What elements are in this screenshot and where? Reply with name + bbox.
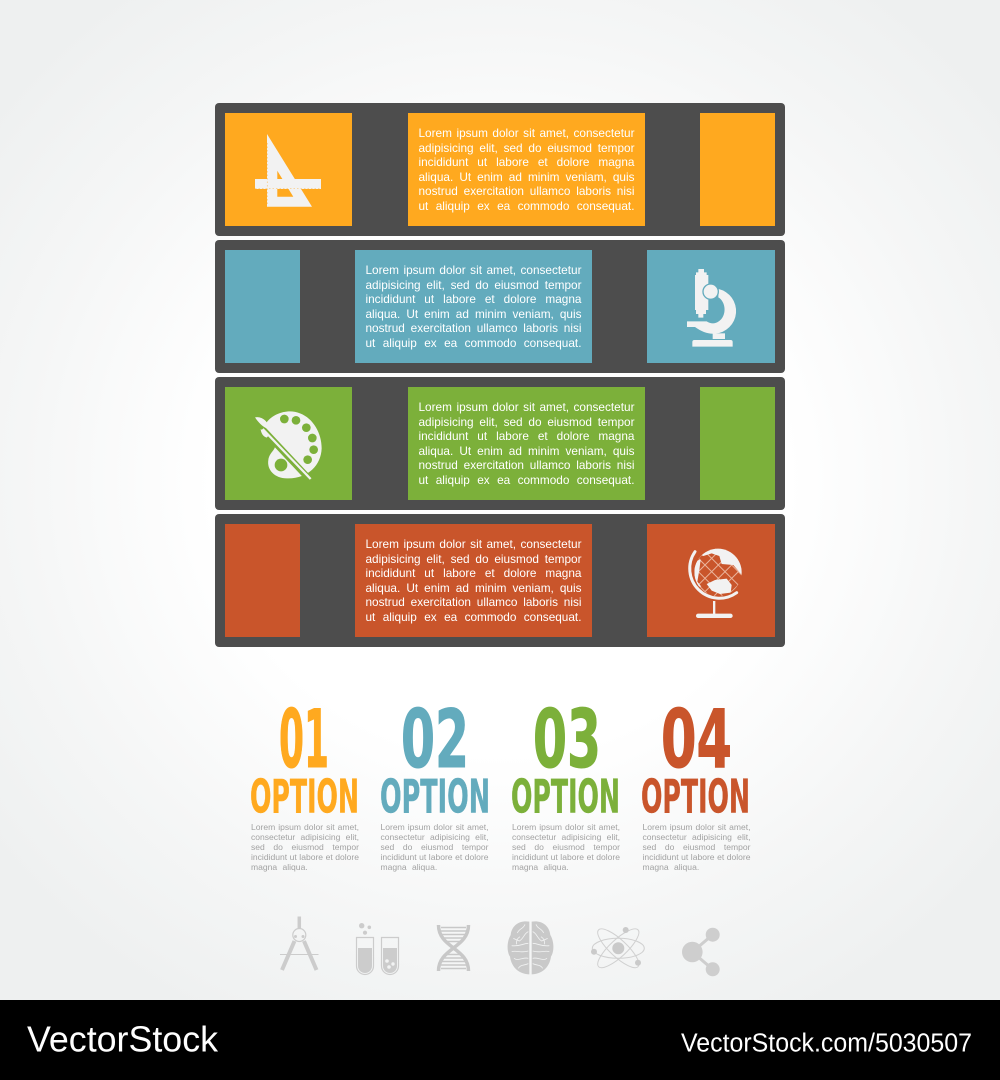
option 1 text: sed do eiusmod tempor <box>251 842 359 852</box>
text block: ut aliquip ex ea commodo consequat. <box>366 336 582 350</box>
option 4 text: Lorem ipsum dolor sit amet, <box>642 822 750 832</box>
red block with globe icon <box>647 524 775 637</box>
text block: adipisicing elit, sed do eiusmod tempor <box>418 414 634 428</box>
icon: painter palette <box>255 411 322 480</box>
text block: nostrud exercitation ullamco laboris nisi <box>366 595 582 609</box>
option 2 text: incididunt ut labore et dolore <box>380 852 488 862</box>
icon: set square and ruler <box>255 134 321 207</box>
green block with palette icon <box>225 387 352 500</box>
option 2 text: magna aliqua. <box>380 862 437 872</box>
option 1 text <box>251 822 359 872</box>
text block: Lorem ipsum dolor sit amet, consectetur <box>366 537 582 551</box>
footer watermark bar <box>0 1000 1000 1080</box>
icon: compass <box>280 916 318 970</box>
orange side block <box>700 113 775 226</box>
text block: Lorem ipsum dolor sit amet, consectetur <box>418 126 634 140</box>
option 2 text: sed do eiusmod tempor <box>380 842 488 852</box>
text block: adipisicing elit, sed do eiusmod tempor <box>418 140 634 154</box>
text block: incididunt ut labore et dolore magna <box>366 292 582 306</box>
panel: row 2 <box>215 240 785 373</box>
text block: aliqua. Ut enim ad minim veniam, quis <box>366 306 582 320</box>
option 4 text: incididunt ut labore et dolore <box>642 852 750 862</box>
text block: ut aliquip ex ea commodo consequat. <box>366 610 582 624</box>
blue side block <box>225 250 300 363</box>
option 4 text: sed do eiusmod tempor <box>642 842 750 852</box>
icon: share nodes <box>682 928 720 976</box>
number 02: 02 <box>401 693 469 786</box>
text block <box>355 524 592 637</box>
option 1 text: magna aliqua. <box>251 862 308 872</box>
heading OPTION 3: OPTION <box>511 770 620 824</box>
text block: ut aliquip ex ea commodo consequat. <box>418 472 634 486</box>
option 3 text: magna aliqua. <box>512 862 569 872</box>
text block <box>355 250 592 363</box>
text block: ut aliquip ex ea commodo consequat. <box>418 198 634 212</box>
logo text: VectorStock <box>27 1018 219 1060</box>
option 4 text: magna aliqua. <box>642 862 699 872</box>
text block: aliqua. Ut enim ad minim veniam, quis <box>418 170 634 184</box>
red side block <box>225 524 300 637</box>
text block: aliqua. Ut enim ad minim veniam, quis <box>418 444 634 458</box>
text block: incididunt ut labore et dolore magna <box>418 429 634 443</box>
option 3 text: consectetur adipisicing elit, <box>512 832 620 842</box>
option 3 text: incididunt ut labore et dolore <box>512 852 620 862</box>
text block: aliqua. Ut enim ad minim veniam, quis <box>366 580 582 594</box>
option 4 text: consectetur adipisicing elit, <box>642 832 750 842</box>
text block: incididunt ut labore et dolore magna <box>418 155 634 169</box>
text block: incididunt ut labore et dolore magna <box>366 566 582 580</box>
option 2 text <box>380 822 488 872</box>
panel: row 4 <box>215 514 785 647</box>
orange block with ruler icon <box>225 113 352 226</box>
text block <box>408 113 645 226</box>
option 1 text: consectetur adipisicing elit, <box>251 832 359 842</box>
text block: Lorem ipsum dolor sit amet, consectetur <box>366 263 582 277</box>
heading OPTION 4: OPTION <box>641 770 750 824</box>
number 03: 03 <box>533 693 601 786</box>
option 2 text: consectetur adipisicing elit, <box>380 832 488 842</box>
text block: Lorem ipsum dolor sit amet, consectetur <box>418 400 634 414</box>
option 3 text: sed do eiusmod tempor <box>512 842 620 852</box>
text block: adipisicing elit, sed do eiusmod tempor <box>366 278 582 292</box>
icon: atom <box>591 924 644 973</box>
text block: nostrud exercitation ullamco laboris nisi <box>366 321 582 335</box>
option 3 text <box>512 822 620 872</box>
icon: microscope <box>687 269 736 347</box>
logo text: VectorStock.com/5030507 <box>681 1030 972 1058</box>
text block: nostrud exercitation ullamco laboris nisi <box>418 458 634 472</box>
blue block with microscope icon <box>647 250 775 363</box>
icon: globe <box>688 548 742 618</box>
option 2 text: Lorem ipsum dolor sit amet, <box>380 822 488 832</box>
panel: row 3 <box>215 377 785 510</box>
icon: DNA helix <box>438 925 468 971</box>
logo text <box>27 1018 972 1060</box>
option 4 text <box>642 822 750 872</box>
text block: adipisicing elit, sed do eiusmod tempor <box>366 552 582 566</box>
heading OPTION 1: OPTION <box>250 770 359 824</box>
option 1 text: incididunt ut labore et dolore <box>251 852 359 862</box>
option 3 text: Lorem ipsum dolor sit amet, <box>512 822 620 832</box>
heading OPTION 2: OPTION <box>380 770 490 824</box>
icon: brain <box>508 921 553 974</box>
text block <box>408 387 645 500</box>
text block: nostrud exercitation ullamco laboris nisi <box>418 184 634 198</box>
icon: test tubes <box>356 923 398 974</box>
option 1 text: Lorem ipsum dolor sit amet, <box>251 822 359 832</box>
option numbers and titles: 01 <box>279 693 329 786</box>
green side block <box>700 387 775 500</box>
panel: row 1 <box>215 103 785 236</box>
number 04: 04 <box>661 693 732 786</box>
